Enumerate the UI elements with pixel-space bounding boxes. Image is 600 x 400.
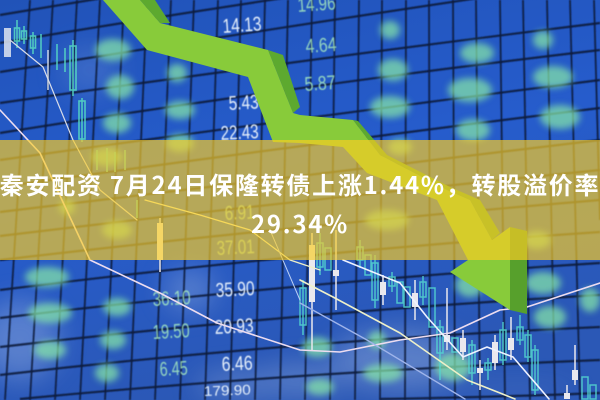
ticker numbers: 22.43 (220, 121, 259, 145)
headline: 秦安配资 7月24日保隆转债上涨1.44%，转股溢价率 (0, 166, 600, 201)
arrow head right facet (510, 227, 527, 314)
ticker numbers: 37.01 (216, 236, 255, 260)
ticker numbers: 5.87 (304, 72, 336, 96)
ticker numbers: 14.13 (222, 13, 262, 38)
candlesticks: bottom right (157, 218, 596, 399)
ticker numbers: 5.43 (228, 91, 259, 115)
ticker numbers: 179.90 (204, 381, 251, 399)
headline: 29.34% (251, 205, 349, 240)
ticker numbers: 20.93 (214, 315, 254, 339)
candlesticks: top left (4, 20, 137, 218)
ticker numbers: 6.91 (224, 201, 255, 225)
ticker numbers (152, 0, 337, 399)
ticker numbers: 35.90 (215, 278, 255, 302)
arrow shaft and head (103, 0, 510, 310)
ticker numbers: 36.10 (152, 287, 191, 311)
arrow dark side facets (140, 0, 500, 240)
ticker numbers: 6.46 (221, 352, 253, 376)
translucent yellow band (0, 140, 600, 260)
ticker numbers: 19.50 (152, 320, 190, 344)
ticker numbers: 4.64 (305, 34, 337, 58)
ticker numbers: 6.45 (159, 358, 188, 381)
headline (0, 166, 600, 240)
